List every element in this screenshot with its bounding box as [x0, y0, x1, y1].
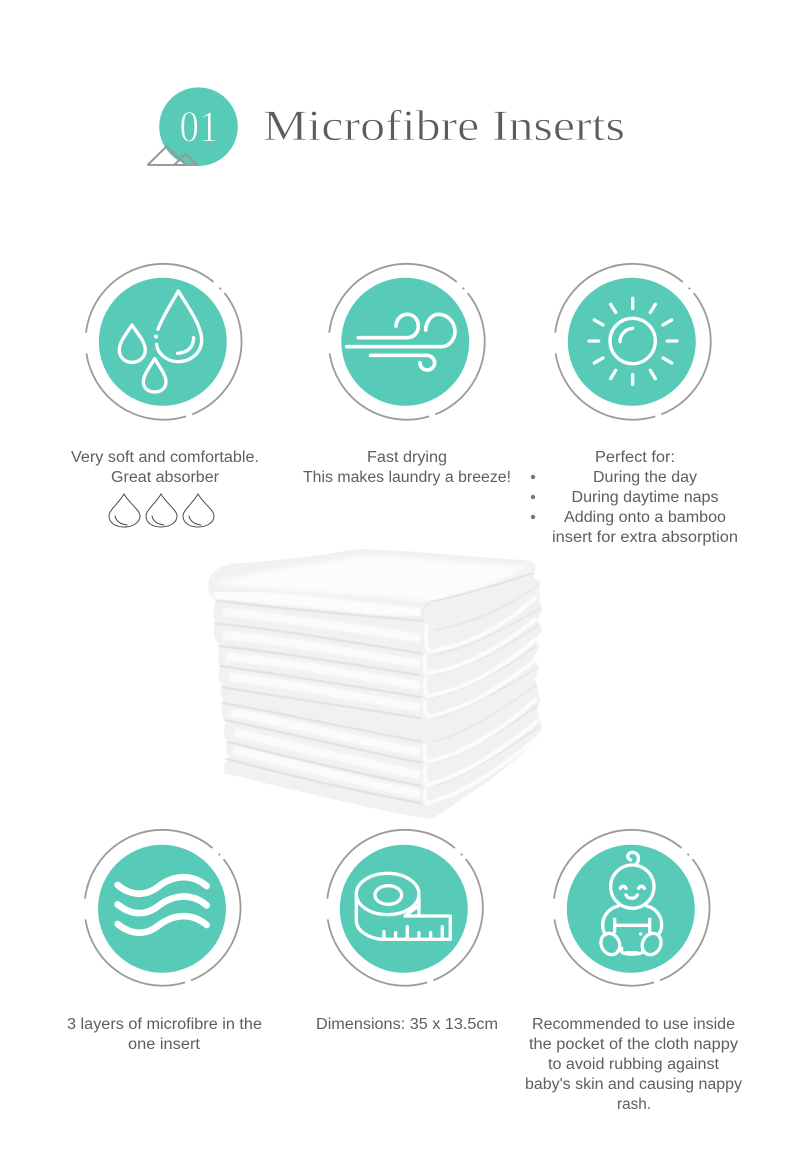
text: perfect for list: [531, 449, 738, 546]
text: soft and absorbent: Great absorber: [111, 469, 219, 486]
text: recommendation: baby's skin and causing nappy: [525, 1076, 742, 1093]
icon: measuring tape: [327, 830, 483, 986]
text: three layers: 3 layers of microfibre in the: [67, 1016, 262, 1033]
text: fast drying: [303, 449, 511, 486]
text: perfect for list: Adding onto a bamboo: [564, 509, 726, 526]
text: recommendation: Recommended to use inside: [532, 1016, 735, 1033]
text: recommendation: [525, 1016, 742, 1113]
text: perfect for list: During the day: [593, 469, 697, 486]
icon: wind: [329, 264, 485, 420]
header badge: number 01: [148, 87, 238, 166]
towel stack illustration: [208, 549, 542, 819]
text: three layers: one insert: [128, 1036, 201, 1053]
icon: baby: [554, 830, 710, 986]
icon: layers waves: [85, 830, 241, 986]
icon: water drops: [86, 264, 242, 420]
text: recommendation: rash.: [617, 1096, 651, 1113]
text: perfect for list: insert for extra absorption: [552, 529, 738, 546]
text: fast drying: Fast drying: [367, 449, 447, 466]
icon: three absorbency drops: [109, 494, 214, 527]
text: perfect for list: Perfect for:: [595, 449, 675, 466]
text: recommendation: the pocket of the cloth nappy: [529, 1036, 738, 1053]
icon: sun: [555, 264, 711, 420]
text: three layers: [67, 1016, 262, 1053]
text: soft and absorbent: Very soft and comfortable.: [71, 449, 259, 466]
text: fast drying: This makes laundry a breeze!: [303, 469, 511, 486]
title: Microfibre Inserts: [263, 103, 625, 150]
text: dimensions: Dimensions: 35 x 13.5cm: [316, 1016, 498, 1033]
text: soft and absorbent: [71, 449, 259, 486]
text: perfect for list: During daytime naps: [572, 489, 719, 506]
header badge: number 01: 01: [180, 102, 218, 151]
text: recommendation: to avoid rubbing against: [548, 1056, 720, 1073]
